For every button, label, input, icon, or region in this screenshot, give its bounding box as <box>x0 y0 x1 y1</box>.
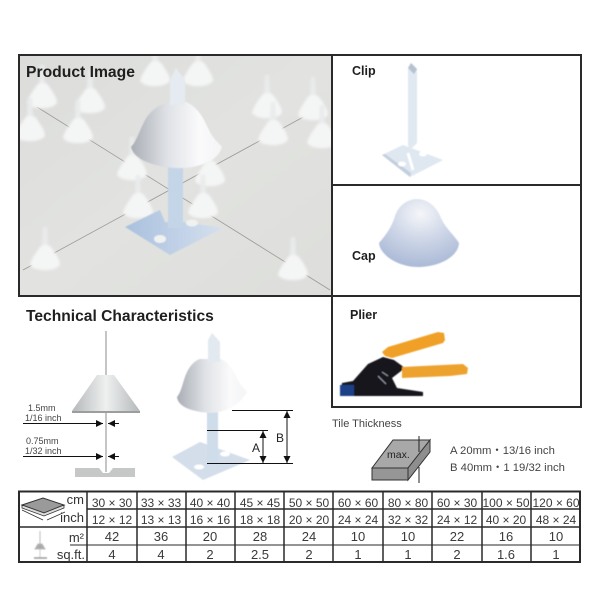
row: cm: 45 × 45 <box>240 496 281 510</box>
row: inch: 24 × 24 <box>338 513 379 527</box>
row: cm: 60 × 30 <box>437 496 478 510</box>
label: B: B <box>276 431 284 445</box>
panel: clip <box>352 63 443 177</box>
icon: plier <box>340 332 468 396</box>
label: 1/32 inch: 1/32 inch <box>25 446 62 456</box>
icon: tile thickness: max. <box>387 449 410 461</box>
heading: cap: Cap <box>352 249 376 263</box>
row: square feet: 4 <box>108 547 116 562</box>
row: square metres: 28 <box>253 529 267 544</box>
label: A: A <box>252 441 260 455</box>
row: square metres: 20 <box>203 529 217 544</box>
table: tile sizes and consumption: m² <box>69 530 85 545</box>
row: cm: 40 × 40 <box>190 496 231 510</box>
row: inch: 48 × 24 <box>536 513 577 527</box>
row: cm: 120 × 60 <box>532 496 580 510</box>
row: square feet: 4 <box>157 547 165 562</box>
icon: tile thickness <box>372 436 430 483</box>
table: tile sizes and consumption: inch <box>60 510 84 525</box>
dimension arrows <box>23 424 119 456</box>
row: square feet: 2 <box>305 547 313 562</box>
row: cm: 60 × 60 <box>338 496 379 510</box>
panel: cap <box>352 199 459 267</box>
icon: clip <box>382 63 443 177</box>
label: 1.5mm: 1.5mm <box>28 403 56 413</box>
row: cm: 80 × 80 <box>388 496 429 510</box>
row: cm: 33 × 33 <box>141 496 182 510</box>
row: square feet: 1 <box>552 547 560 562</box>
row: square feet: 1.6 <box>497 547 515 562</box>
row: cm: 30 × 30 <box>92 496 133 510</box>
heading: plier: Plier <box>350 308 377 322</box>
row: inch: 13 × 13 <box>141 513 182 527</box>
row: square metres: 16 <box>499 529 513 544</box>
heading: product image: Product Image <box>26 64 135 81</box>
row: inch <box>92 513 577 527</box>
table: tile sizes and consumption: sq.ft. <box>57 547 85 562</box>
row: square metres: 10 <box>351 529 365 544</box>
text: B dimension: B 40mm・1 19/32 inch <box>450 462 565 474</box>
tile grout lines <box>23 107 330 290</box>
icon: clip and cap <box>34 531 47 558</box>
row: square feet: 1 <box>354 547 362 562</box>
large clip and cap <box>125 68 223 255</box>
row: inch: 20 × 20 <box>289 513 330 527</box>
row: square metres: 22 <box>450 529 464 544</box>
row: inch: 18 × 18 <box>240 513 281 527</box>
row: inch: 12 × 12 <box>92 513 133 527</box>
row labels: cm <box>67 492 84 507</box>
diagram: assembled clip with dimensions <box>172 333 293 480</box>
table grid <box>19 491 580 562</box>
row: inch: 32 × 32 <box>388 513 429 527</box>
diagram: cross section <box>23 331 140 477</box>
row: cm: 50 × 50 <box>289 496 330 510</box>
label: 1/16 inch: 1/16 inch <box>25 413 62 423</box>
panel: product image <box>15 43 337 296</box>
icon: cap <box>379 199 459 267</box>
row: square metres: 36 <box>154 529 168 544</box>
row: cm <box>92 496 580 510</box>
row: square metres: 10 <box>401 529 415 544</box>
text: A dimension: A 20mm・13/16 inch <box>450 445 555 457</box>
row: square metres: 24 <box>302 529 316 544</box>
row: cm: 100 × 50 <box>482 496 530 510</box>
dimension lines <box>207 410 293 464</box>
row: square feet: 2 <box>206 547 214 562</box>
row: square metres <box>105 529 563 544</box>
row: inch: 16 × 16 <box>190 513 231 527</box>
row: square feet: 1 <box>404 547 412 562</box>
row: inch: 40 × 20 <box>486 513 527 527</box>
panel frames <box>19 55 581 407</box>
row: inch: 24 × 12 <box>437 513 478 527</box>
heading: clip: Clip <box>352 64 376 78</box>
heading: tile thickness: Tile Thickness <box>332 418 402 430</box>
panel: plier <box>340 308 468 396</box>
row: square metres: 42 <box>105 529 119 544</box>
icon: tile <box>22 498 65 520</box>
heading: technical characteristics: Technical Characteristics <box>26 308 214 325</box>
row: square metres: 10 <box>549 529 563 544</box>
row: square feet: 2.5 <box>251 547 269 562</box>
small caps in background <box>15 43 337 280</box>
table: tile sizes and consumption <box>19 491 580 562</box>
row: square feet: 2 <box>453 547 461 562</box>
row: square feet <box>108 547 560 562</box>
label: 0.75mm: 0.75mm <box>26 436 59 446</box>
